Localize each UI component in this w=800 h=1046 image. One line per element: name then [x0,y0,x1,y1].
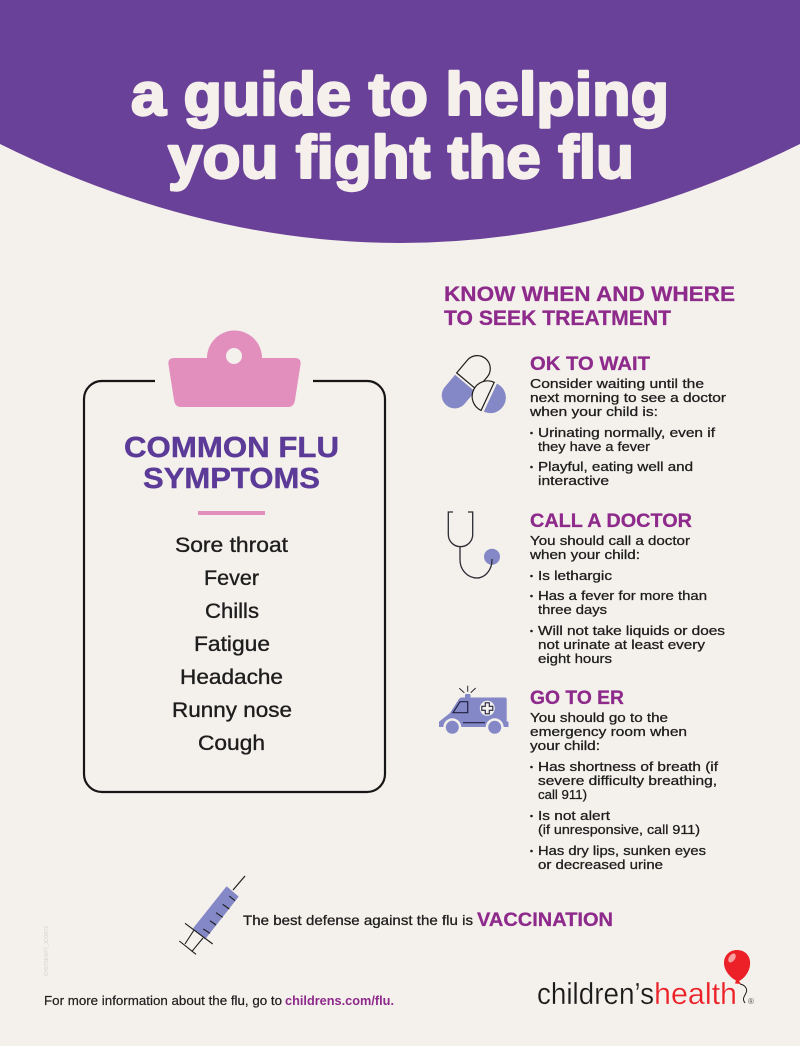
section: go to er: GO TO ER [530,688,624,709]
icon: pills [436,350,511,418]
section: call a doctor: three days [538,602,607,617]
footer note: For more information about the flu, go to [44,993,282,1008]
symptom list: Chills [205,600,259,623]
icon: clipboard clip [168,331,301,407]
title: you fight the flu [168,124,634,191]
section: go to er: call 911) [538,787,587,802]
symptom list: Runny nose [172,699,292,722]
icon: stethoscope [448,512,500,578]
logo: children's health: health [654,976,737,1011]
vertical job code: CHST564077_JCOR72 [44,926,50,976]
section: go to er: or decreased urine [538,857,663,872]
section: call a doctor: not urinate at least every [538,637,705,652]
section: go to er [530,688,718,872]
section: call a doctor: You should call a doctor [530,533,691,548]
section: go to er: Has dry lips, sunken eyes [538,843,706,858]
symptom list: Fever [204,567,259,590]
section: ok to wait: Urinating normally, even if [538,425,715,440]
panel: common flu symptoms clipboard [84,331,385,792]
heading: common flu symptoms: SYMPTOMS [143,463,320,495]
heading: common flu symptoms [124,432,339,495]
vaccination message: VACCINATION [477,910,613,931]
heading divider [198,511,265,515]
symptom list: Headache [180,666,283,689]
section: call a doctor: Will not take liquids or does [538,623,725,638]
logo: children's health: ® [748,997,754,1006]
section: ok to wait: next morning to see a doctor [530,390,727,405]
section: call a doctor: Has a fever for more than [538,588,707,603]
symptom list [172,534,292,755]
section: ok to wait: OK TO WAIT [530,354,650,375]
section: ok to wait: Consider waiting until the [530,376,704,391]
heading: common flu symptoms: COMMON FLU [124,432,339,464]
section: call a doctor: eight hours [538,651,612,666]
icon: balloon [724,950,750,984]
vaccination message [243,910,613,931]
vaccination message: The best defense against the flu is [243,913,473,928]
section: go to er: emergency room when [530,724,687,739]
section: call a doctor: Is lethargic [538,568,612,583]
logo: children's health [537,950,754,1011]
section: go to er: (if unresponsive, call 911) [538,822,700,837]
section: go to er: severe difficulty breathing, [538,773,717,788]
icon: ambulance [439,686,508,736]
logo: children's health: children’s [537,976,654,1011]
symptom list: Sore throat [175,534,288,557]
heading: know when and where to seek treatment: TO SEEK TREATMENT [444,307,671,330]
footer note: childrens.com/flu. [285,993,394,1008]
section: ok to wait [529,354,727,488]
title: a guide to helping [131,61,669,128]
section: ok to wait: Playful, eating well and [538,459,693,474]
footer note [44,993,394,1008]
heading: know when and where to seek treatment: KNOW WHEN AND WHERE [444,283,735,306]
section: call a doctor [529,511,725,666]
section: ok to wait: when your child is: [529,404,658,419]
section: call a doctor: CALL A DOCTOR [530,511,692,532]
heading: know when and where to seek treatment [444,283,735,330]
symptom list: Fatigue [194,633,270,656]
section: call a doctor: when your child: [529,547,640,562]
section: ok to wait: interactive [538,473,609,488]
symptom list: Cough [198,732,265,755]
section: go to er: Is not alert [538,808,610,823]
clipboard outline [84,381,385,792]
header banner [0,0,800,243]
icon: syringe [179,876,245,954]
section: go to er: You should go to the [530,710,668,725]
section: ok to wait: they have a fever [538,439,651,454]
title [131,61,669,191]
section: go to er: Has shortness of breath (if [538,759,718,774]
section: go to er: your child: [530,738,600,753]
